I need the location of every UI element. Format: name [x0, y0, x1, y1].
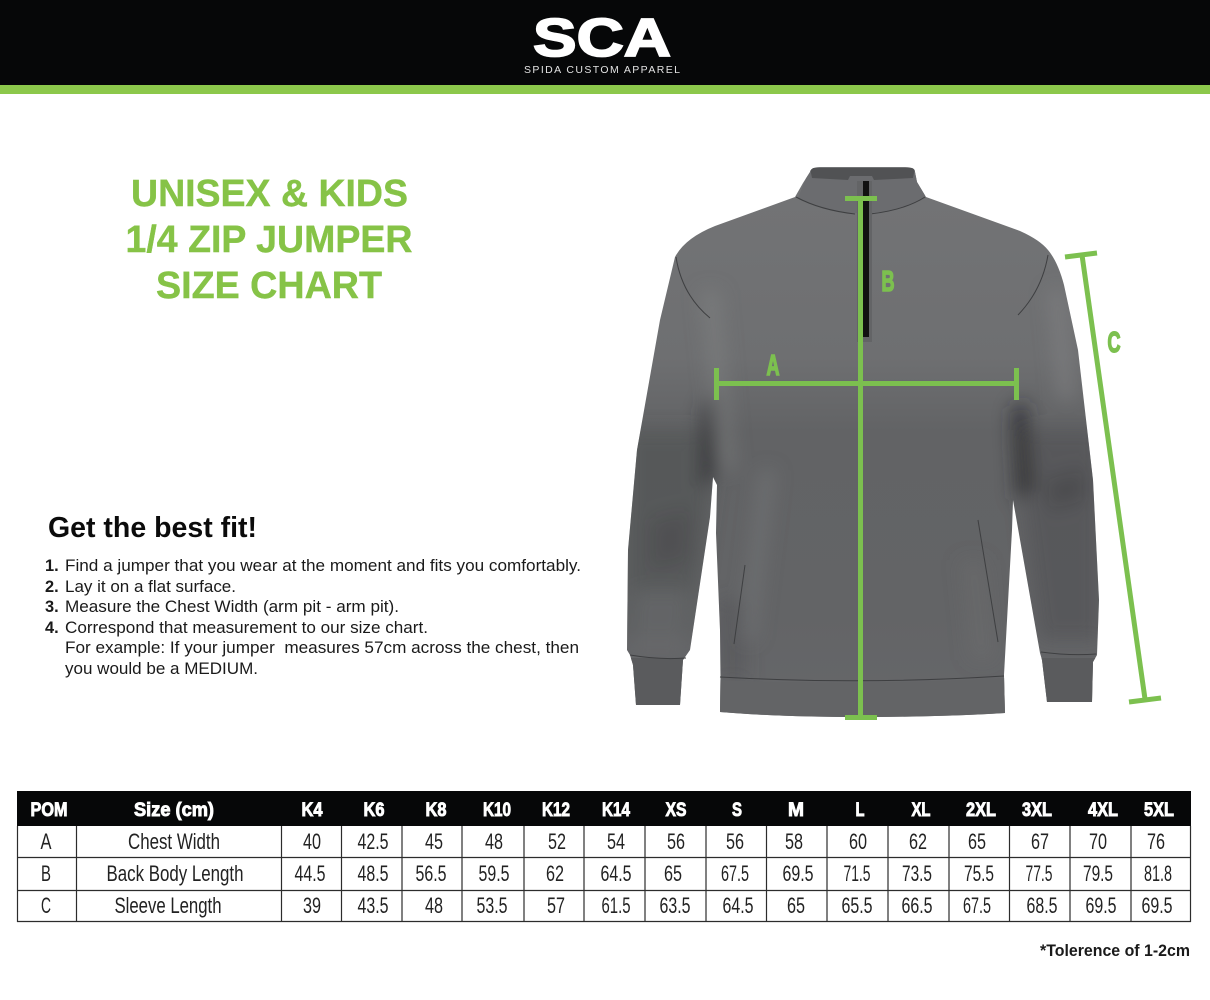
title	[126, 173, 412, 307]
size table	[17, 791, 1191, 922]
row B: back body length: 75.5	[964, 861, 994, 886]
footnote: tolerance: *Tolerence of 1-2cm	[1040, 942, 1190, 960]
title: UNISEX & KIDS	[131, 173, 408, 215]
row B: back body length: 62	[546, 861, 564, 886]
instructions list: 4.	[45, 619, 59, 637]
row C: sleeve length: 57	[547, 893, 565, 918]
row C: sleeve length: 69.5	[1142, 893, 1172, 918]
row B: back body length: 69.5	[782, 861, 814, 886]
table header row: K12	[542, 800, 570, 821]
title: 1/4 ZIP JUMPER	[126, 219, 412, 261]
row C: sleeve length: C	[41, 893, 51, 918]
row C: sleeve length: 43.5	[358, 893, 388, 918]
instructions list: Find a jumper that you wear at the moment and fits you comfortably.	[65, 557, 581, 575]
row B: back body length: 56.5	[416, 861, 446, 886]
table header row: Size (cm)	[134, 800, 214, 821]
measure line B: body length	[845, 196, 894, 720]
table header row: L	[856, 800, 865, 821]
table header row: XL	[912, 800, 931, 821]
row A: chest width: 67	[1031, 829, 1049, 854]
row A: chest width: 45	[425, 829, 443, 854]
row A: chest width: 54	[607, 829, 625, 854]
row B: back body length: 48.5	[358, 861, 388, 886]
row B: back body length: 67.5	[721, 861, 749, 886]
row A: chest width: Chest Width	[128, 829, 220, 854]
logo: SCA: SPIDA CUSTOM APPAREL	[524, 64, 680, 76]
row B: back body length: 64.5	[600, 861, 632, 886]
jumper illustration	[620, 160, 1110, 725]
table header row: 3XL	[1022, 800, 1052, 821]
row B: back body length: 81.8	[1144, 861, 1172, 886]
row C: sleeve length: 65	[787, 893, 805, 918]
row C: sleeve length: 65.5	[842, 893, 872, 918]
row C: sleeve length: 63.5	[660, 893, 690, 918]
table header row: 2XL	[966, 800, 996, 821]
measure line B: body length: B	[882, 266, 894, 298]
row C: sleeve length: 48	[425, 893, 443, 918]
table header row: K6	[364, 800, 384, 821]
table header row: K14	[602, 800, 630, 821]
row A: chest width: 48	[485, 829, 503, 854]
row C: sleeve length: 68.5	[1026, 893, 1058, 918]
row A: chest width: 70	[1089, 829, 1107, 854]
row A: chest width: 42.5	[358, 829, 388, 854]
row A: chest width: 56	[726, 829, 744, 854]
header band	[0, 0, 1210, 94]
row A: chest width: 52	[548, 829, 566, 854]
seams	[630, 197, 1096, 681]
instructions list: 2.	[45, 578, 59, 596]
measure line C: sleeve length	[1065, 253, 1161, 702]
row B: back body length: 65	[664, 861, 682, 886]
row A: chest width: 76	[1147, 829, 1165, 854]
table header row: K4	[302, 800, 323, 821]
table header row: K10	[483, 800, 511, 821]
row B: back body length: 59.5	[478, 861, 510, 886]
row C: sleeve length: 66.5	[902, 893, 932, 918]
table header row: K8	[426, 800, 446, 821]
table header row: 4XL	[1088, 800, 1118, 821]
instructions list: Lay it on a flat surface.	[65, 578, 236, 596]
row B: back body length: 73.5	[902, 861, 932, 886]
sleeve shading	[627, 370, 1099, 674]
row C: sleeve length: 67.5	[963, 893, 991, 918]
row B: back body length	[41, 861, 1172, 886]
table header row: S	[732, 800, 742, 821]
measure line A: chest width: A	[766, 350, 780, 382]
row C: sleeve length: 69.5	[1086, 893, 1116, 918]
row C: sleeve length: 61.5	[602, 893, 630, 918]
row B: back body length: B	[41, 861, 51, 886]
row A: chest width: 65	[968, 829, 986, 854]
row A: chest width: 56	[667, 829, 685, 854]
row C: sleeve length: Sleeve Length	[114, 893, 222, 918]
row B: back body length: Back Body Length	[106, 861, 244, 886]
row A: chest width: 58	[785, 829, 803, 854]
row A: chest width	[40, 829, 1165, 854]
row B: back body length: 71.5	[844, 861, 870, 886]
table header row: POM	[30, 800, 68, 821]
row C: sleeve length: 64.5	[722, 893, 754, 918]
instructions list: For example: If your jumper measures 57cm across the chest, then	[65, 639, 579, 657]
row A: chest width: 62	[909, 829, 927, 854]
ribbed cuffs and hem	[630, 658, 695, 708]
instructions list	[45, 557, 581, 678]
row A: chest width: A	[40, 829, 52, 854]
row B: back body length: 79.5	[1083, 861, 1113, 886]
row A: chest width: 40	[303, 829, 321, 854]
title: SIZE CHART	[156, 265, 382, 307]
measure line A: chest width	[714, 350, 1019, 400]
row B: back body length: 77.5	[1026, 861, 1052, 886]
table header row: 5XL	[1144, 800, 1174, 821]
instructions list: you would be a MEDIUM.	[65, 660, 258, 678]
logo: SCA	[524, 8, 680, 76]
zipper	[857, 181, 872, 342]
measure line C: sleeve length: C	[1108, 327, 1121, 359]
row C: sleeve length	[41, 893, 1172, 918]
row B: back body length: 44.5	[294, 861, 326, 886]
table header row: M	[788, 800, 804, 821]
instructions list: Measure the Chest Width (arm pit - arm pit).	[65, 598, 399, 616]
row C: sleeve length: 39	[303, 893, 321, 918]
heading: get the best fit: Get the best fit!	[48, 512, 257, 544]
instructions list: Correspond that measurement to our size chart.	[65, 619, 428, 637]
instructions list: 1.	[45, 557, 59, 575]
instructions list: 3.	[45, 598, 59, 616]
row C: sleeve length: 53.5	[476, 893, 508, 918]
table header row: XS	[666, 800, 686, 821]
table header row	[17, 791, 1191, 826]
collar	[805, 168, 926, 196]
logo: SCA: SCA	[533, 8, 671, 68]
row A: chest width: 60	[849, 829, 867, 854]
